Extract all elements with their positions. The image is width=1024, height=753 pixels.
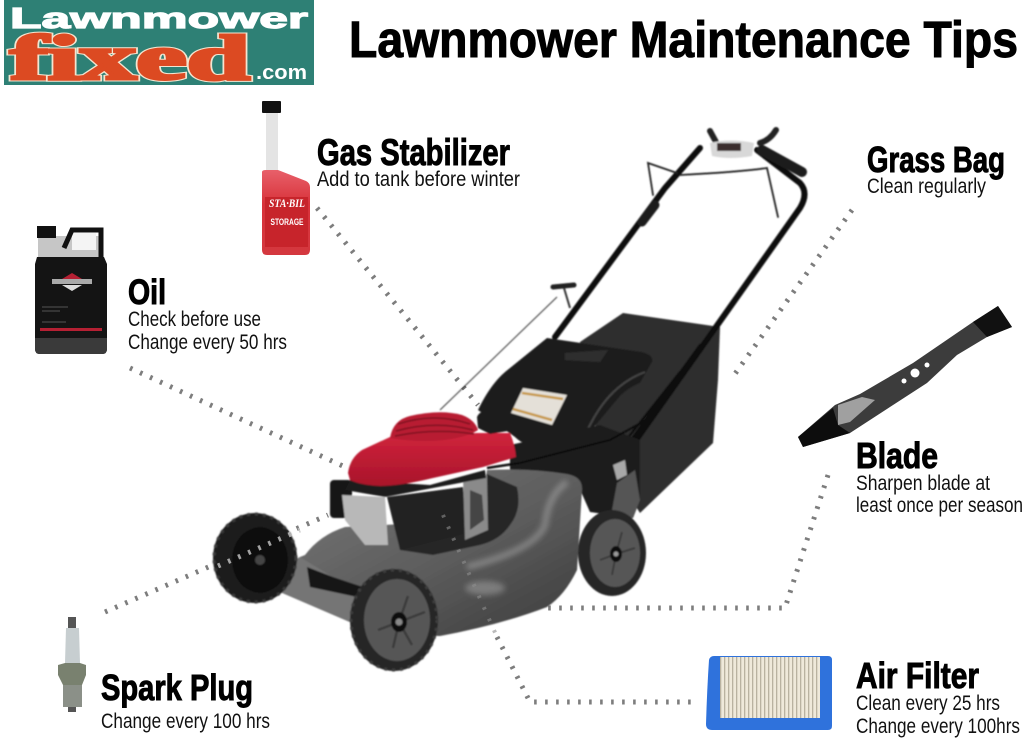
dots over engine and deck	[443, 515, 497, 637]
logo	[4, 0, 314, 93]
front left wheel	[213, 513, 297, 603]
deck highlight	[467, 482, 567, 567]
icon: gas stabilizer bottle: STA·BIL	[269, 198, 305, 210]
fuel cap	[477, 410, 508, 434]
handle control	[710, 140, 754, 158]
dotted line: gas stabilizer	[317, 208, 478, 405]
logo: fixed	[10, 22, 250, 93]
front right wheel	[350, 569, 438, 671]
air filter label	[856, 655, 1020, 738]
spark plug label	[101, 667, 270, 733]
dotted line: spark plug	[105, 515, 328, 612]
dotted line: grass bag	[732, 210, 852, 378]
spark plug label: Change every 100 hrs	[101, 709, 270, 733]
oil label	[128, 273, 287, 354]
deck dark recess	[307, 567, 363, 597]
recoil dome	[390, 412, 478, 441]
engine	[330, 470, 488, 550]
mower	[213, 130, 804, 671]
deck pit	[400, 474, 518, 555]
logo: fixed	[10, 22, 250, 93]
handle	[555, 130, 804, 468]
oil label: Oil	[128, 273, 166, 312]
logo: .com	[256, 62, 307, 84]
air filter label: Air Filter	[856, 655, 979, 696]
starter knob and cable	[440, 285, 574, 410]
dotted line: blade	[540, 475, 828, 608]
dots over front wheel	[218, 530, 300, 566]
blade label: Blade	[856, 435, 938, 476]
icon: oil jug	[35, 226, 107, 354]
grass bag label: Clean regularly	[867, 174, 986, 198]
grass bag label	[867, 139, 1005, 198]
spark plug label: Spark Plug	[101, 667, 253, 708]
dotted line: oil	[130, 368, 345, 467]
blade label	[856, 435, 1023, 517]
engine cable	[487, 418, 650, 468]
gas stabilizer label: Add to tank before winter	[317, 167, 520, 191]
icon: blade	[798, 306, 1012, 447]
icon: spark plug	[58, 617, 86, 712]
hood	[478, 338, 652, 450]
deck	[273, 470, 582, 636]
hood label	[511, 388, 567, 425]
icon: gas stabilizer bottle	[262, 101, 310, 255]
dotted line: air filter	[497, 637, 692, 702]
gas stabilizer label	[317, 132, 520, 191]
grass bag	[580, 313, 720, 513]
rear wheel	[578, 510, 646, 596]
logo: Lawnmower	[10, 3, 308, 35]
icon: air filter	[706, 656, 832, 730]
engine red cover	[348, 433, 516, 486]
deck handle bar	[273, 557, 362, 623]
oil label: Check before use	[128, 307, 261, 331]
gas stabilizer label: Gas Stabilizer	[317, 132, 510, 173]
rear chassis	[510, 425, 640, 518]
blade label: Sharpen blade at	[856, 471, 990, 495]
oil label: Change every 50 hrs	[128, 330, 287, 354]
icon: gas stabilizer bottle: STORAGE	[270, 217, 304, 228]
